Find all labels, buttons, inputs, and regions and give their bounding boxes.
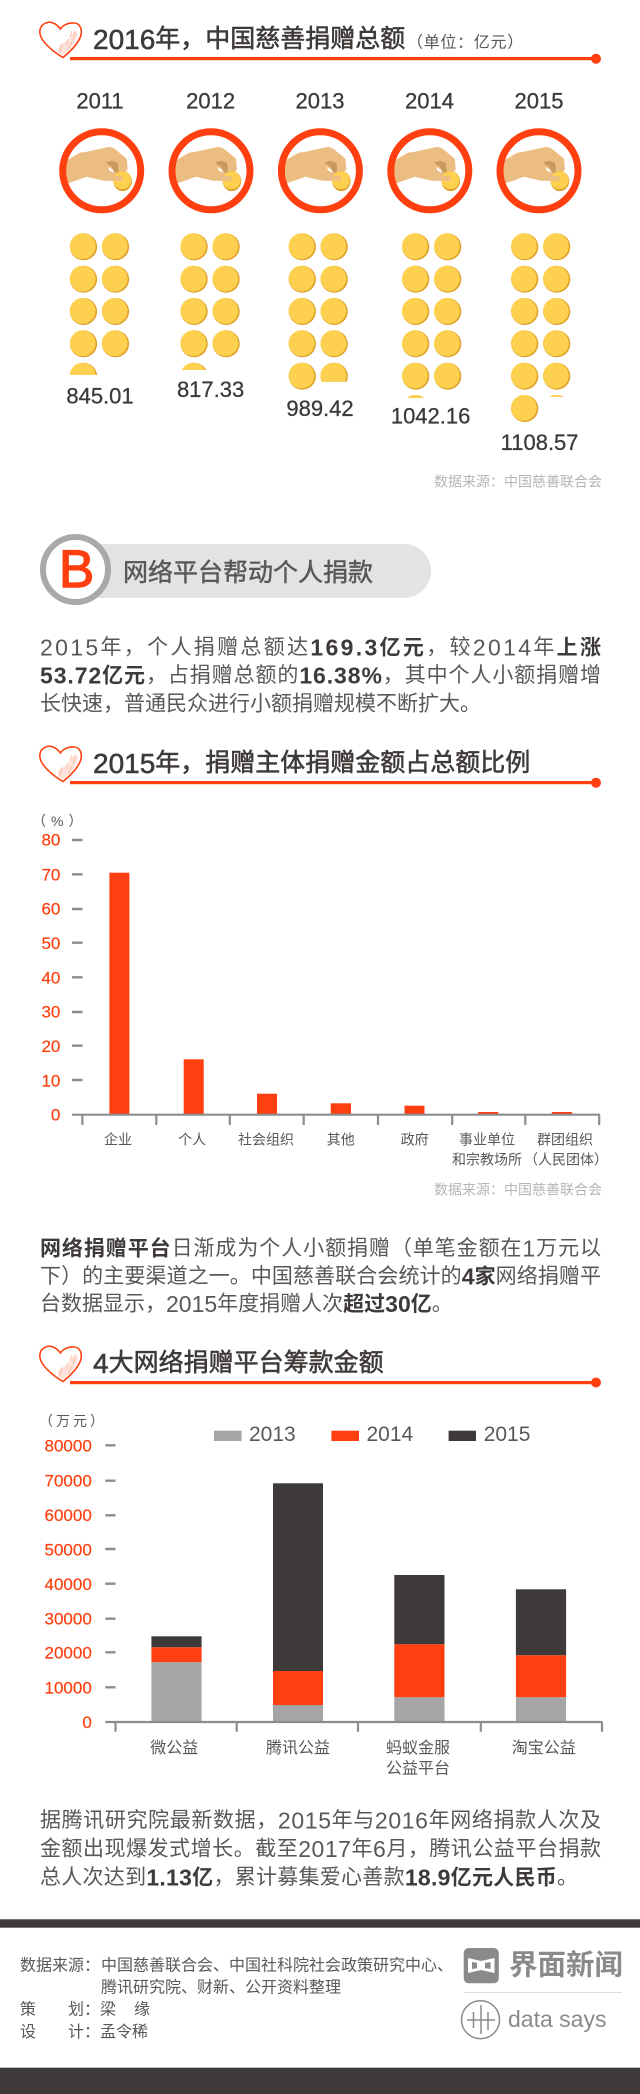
source note 2: 数据来源：中国慈善联合会 bbox=[434, 1181, 602, 1197]
year labels: 2011 bbox=[76, 88, 124, 114]
paragraph: Tencent data: 据腾讯研究院最新数据，2015年与2016年网络捐款人次及 bbox=[40, 1808, 601, 1834]
bar chart: donor share: （人民团体） bbox=[524, 1151, 608, 1167]
section banner B: B bbox=[59, 540, 94, 599]
coin column 2012 bbox=[180, 233, 240, 370]
donation values: 1108.57 bbox=[501, 430, 579, 455]
paragraph: online platforms: 网络捐赠平台日渐成为个人小额捐赠（单笔金额在1万元以 bbox=[40, 1235, 601, 1261]
donation values: 817.33 bbox=[177, 377, 244, 402]
stacked bar chart: platform fundraising: 蚂蚁金服 bbox=[386, 1739, 450, 1757]
bar chart: donor share bbox=[32, 813, 608, 1167]
icons: hand dropping coin in ring bbox=[63, 132, 578, 210]
donation values: 1042.16 bbox=[391, 404, 470, 428]
coin column 2013 bbox=[289, 233, 348, 390]
heading: 2016 total donations: 2016年，中国慈善捐赠总额 bbox=[93, 24, 405, 54]
stacked bar chart: platform fundraising: （万元） bbox=[39, 1413, 107, 1429]
bar chart: donor share: 社会组织 bbox=[238, 1131, 294, 1147]
bar chart: donor share: 60 bbox=[41, 900, 60, 918]
stacked bar chart: platform fundraising: 70000 bbox=[45, 1472, 92, 1490]
stacked bar chart: platform fundraising: 20000 bbox=[45, 1644, 92, 1662]
stacked bar chart: platform fundraising: 腾讯公益 bbox=[266, 1739, 330, 1757]
paragraph: Tencent data bbox=[40, 1808, 601, 1890]
bar chart: donor share: 事业单位 bbox=[459, 1131, 515, 1147]
footer credits: 计： bbox=[68, 2023, 100, 2041]
stacked bar chart: platform fundraising: 公益平台 bbox=[386, 1760, 450, 1778]
section banner B: 网络平台帮动个人捐款 bbox=[123, 559, 373, 587]
bar chart: donor share: 20 bbox=[41, 1037, 60, 1056]
stacked bar chart: platform fundraising: 30000 bbox=[45, 1610, 92, 1628]
stacked bar chart: platform fundraising: 0 bbox=[82, 1713, 92, 1732]
paragraph: personal donations: 2015年，个人捐赠总额达169.3亿元，较2014年上涨 bbox=[40, 635, 601, 661]
stacked bar: 腾讯公益 bbox=[273, 1483, 323, 1722]
bar chart: donor share: 其他 bbox=[327, 1131, 355, 1147]
heading: donor share bbox=[40, 746, 601, 788]
divider bbox=[464, 1992, 622, 1993]
source note 1: 数据来源：中国慈善联合会 bbox=[434, 474, 602, 490]
footer credits: 策 bbox=[20, 2000, 36, 2018]
bar chart: donor share: 个人 bbox=[178, 1131, 206, 1147]
bar chart: donor share: 50 bbox=[41, 934, 60, 953]
stacked bar chart: platform fundraising: 80000 bbox=[45, 1436, 92, 1456]
paragraph: personal donations: 长快速，普通民众进行小额捐赠规模不断扩大。 bbox=[40, 692, 481, 716]
coin column 2014 bbox=[402, 233, 462, 398]
bar chart: donor share: 70 bbox=[41, 866, 60, 884]
year labels bbox=[76, 88, 563, 114]
stacked bar chart: platform fundraising: 50000 bbox=[45, 1540, 92, 1560]
logo: data says bbox=[462, 2001, 606, 2039]
donation values: 989.42 bbox=[286, 396, 354, 421]
bar chart: donor share: 80 bbox=[41, 830, 60, 850]
paragraph: Tencent data: 金额出现爆发式增长。截至2017年6月，腾讯公益平台捐款 bbox=[40, 1836, 601, 1862]
bar chart: donor share: 40 bbox=[41, 968, 60, 988]
year labels: 2015 bbox=[515, 88, 563, 114]
year labels: 2012 bbox=[186, 88, 235, 114]
paragraph: online platforms bbox=[40, 1235, 601, 1317]
footer credits: 设 bbox=[20, 2023, 36, 2041]
footer credits: 梁 bbox=[100, 2000, 116, 2018]
footer credits: 腾讯研究院、财新、公开资料整理 bbox=[101, 1978, 341, 1996]
logo: data says: data says bbox=[508, 2006, 606, 2032]
legend bbox=[214, 1423, 530, 1446]
footer credits: 划： bbox=[68, 2000, 100, 2018]
stacked bar chart: platform fundraising: 60000 bbox=[45, 1506, 92, 1525]
donation values bbox=[66, 377, 579, 455]
stacked bar chart: platform fundraising bbox=[39, 1413, 602, 1778]
legend: 2014 bbox=[366, 1423, 414, 1446]
heading: donor share: 2015年，捐赠主体捐赠金额占总额比例 bbox=[93, 748, 530, 778]
bar chart: donor share: 企业 bbox=[104, 1131, 132, 1147]
footer band top bbox=[0, 1919, 640, 1928]
stacked bar: 微公益 bbox=[151, 1636, 202, 1722]
section banner B bbox=[43, 537, 431, 602]
paragraph: personal donations: 53.72亿元，占捐赠总额的16.38%，其中个人小额捐赠增 bbox=[40, 663, 601, 689]
stacked bar chart: platform fundraising: 微公益 bbox=[150, 1739, 198, 1757]
coin column 2011 bbox=[70, 233, 129, 390]
heading: four platforms: 4大网络捐赠平台筹款金额 bbox=[93, 1348, 384, 1378]
year labels: 2013 bbox=[296, 88, 344, 114]
heading: four platforms bbox=[40, 1346, 601, 1388]
legend: 2013 bbox=[249, 1423, 296, 1446]
paragraph: online platforms: 下）的主要渠道之一。中国慈善联合会统计的4家网络捐赠平 bbox=[40, 1263, 601, 1289]
legend: 2015 bbox=[484, 1423, 530, 1446]
logo: Jiemian News bbox=[464, 1948, 623, 1983]
footer credits: 数据来源： bbox=[20, 1956, 100, 1974]
footer band bottom bbox=[0, 2068, 640, 2094]
paragraph: personal donations bbox=[40, 635, 601, 716]
footer credits: 孟令稀 bbox=[100, 2023, 148, 2041]
year labels: 2014 bbox=[405, 88, 454, 114]
coin column 2015 bbox=[511, 233, 570, 422]
footer credits bbox=[20, 1956, 453, 2041]
stacked bar chart: platform fundraising: 10000 bbox=[45, 1678, 92, 1698]
bar chart: donor share: 0 bbox=[51, 1106, 60, 1124]
footer credits: 中国慈善联合会、中国社科院社会政策研究中心、 bbox=[101, 1956, 453, 1974]
logo: Jiemian News: 界面新闻 bbox=[509, 1950, 623, 1982]
stacked bar: 淘宝公益 bbox=[516, 1589, 566, 1722]
stacked bar: 蚂蚁金服公益平台 bbox=[394, 1575, 444, 1722]
bar chart: donor share: （%） bbox=[32, 813, 87, 829]
bar chart: donor share: 30 bbox=[41, 1002, 60, 1022]
bar chart: donor share: 群团组织 bbox=[537, 1131, 593, 1147]
bar chart: donor share: 10 bbox=[41, 1072, 60, 1090]
footer credits: 缘 bbox=[134, 2000, 150, 2018]
stacked bar chart: platform fundraising: 淘宝公益 bbox=[512, 1739, 576, 1757]
bar chart: donor share: 和宗教场所 bbox=[452, 1151, 522, 1167]
paragraph: online platforms: 台数据显示，2015年度捐赠人次超过30亿。 bbox=[40, 1291, 453, 1317]
paragraph: Tencent data: 总人次达到1.13亿，累计募集爱心善款18.9亿元人民币。 bbox=[40, 1864, 578, 1890]
stacked bar chart: platform fundraising: 40000 bbox=[45, 1575, 92, 1594]
donation values: 845.01 bbox=[66, 384, 134, 408]
heading: 2016 total donations bbox=[40, 22, 601, 64]
heading: 2016 total donations: （单位：亿元） bbox=[407, 34, 524, 52]
bar chart: donor share: 政府 bbox=[401, 1131, 429, 1147]
